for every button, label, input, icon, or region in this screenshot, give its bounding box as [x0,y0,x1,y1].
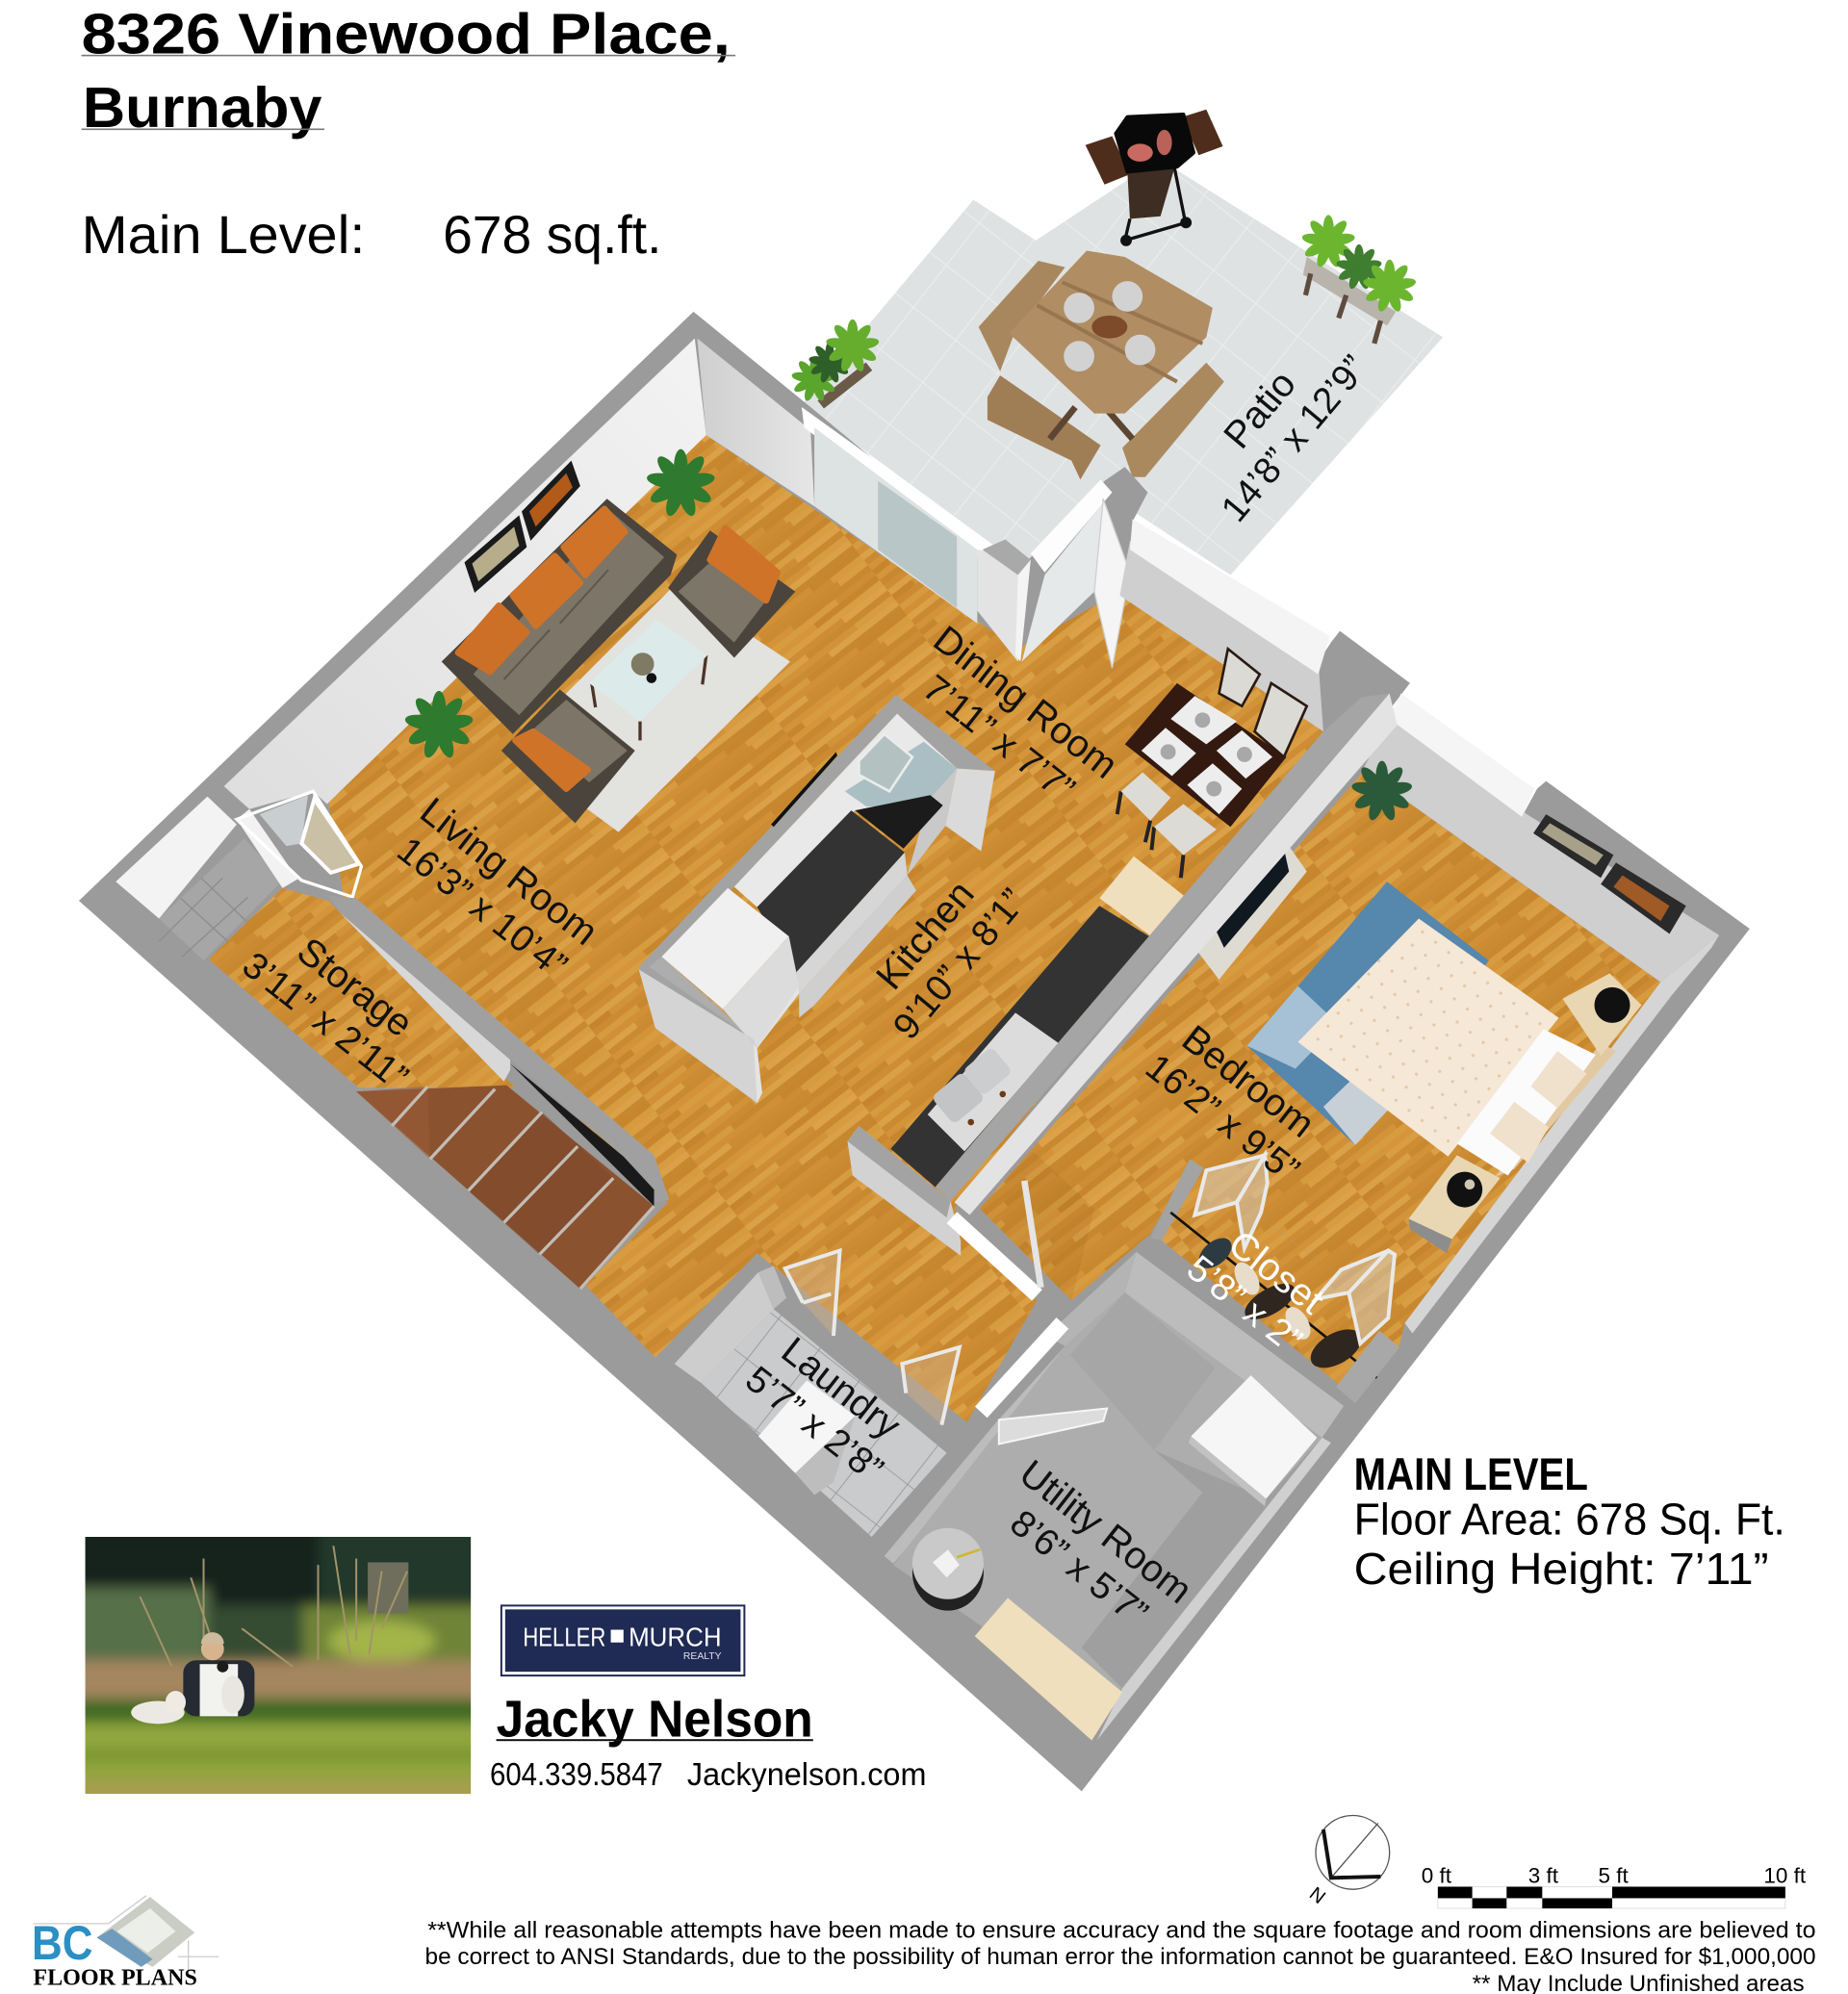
dining room back wall with window [1119,519,1410,731]
title: 8326 Vinewood Place, [82,2,731,66]
room label: living room: 16’3” x 10’4” [390,830,575,986]
agent name: Jacky Nelson [497,1691,813,1749]
panel: laundry [675,1251,960,1537]
panel: utility room [885,1252,1344,1741]
partition wall [936,694,1398,1215]
logo: Heller Murch Realty: HELLER [523,1623,605,1652]
panel: bedroom [980,694,1750,1333]
barbecue grill [1086,110,1222,246]
nightstands and lamps [1562,973,1641,1056]
artwork on living room wall [465,461,580,593]
plant left of sofa [404,691,474,760]
agent contact: Jackynelson.com [687,1757,926,1793]
wall pictures [1533,814,1613,878]
right wall face [1405,935,1719,1333]
living room rug [509,585,790,832]
disclaimer: be correct to ANSI Standards, due to the possibility of human error the information cannot be guaranteed. E&O Insured for $1,000,000 [425,1944,1816,1970]
closet left wall [1150,1159,1204,1240]
room label: laundry [737,1322,919,1491]
logo: BC Floor Plans: BC [32,1916,93,1970]
room label: dining room: Dining Room [926,618,1125,787]
doorway frame [1031,479,1112,573]
logo: Heller Murch Realty: REALTY [683,1651,722,1662]
patio door leaf [1094,498,1130,668]
headboard area [1495,1043,1616,1177]
outer wall cap [639,695,995,1103]
panel: living, dining and kitchen floor [328,435,1323,1422]
wall pillar beside door [977,550,1031,661]
sliding patio door [814,427,977,624]
agent contact: 604.339.5847 [490,1757,663,1793]
scale bar: 0 ft [1422,1864,1452,1888]
bedroom back wall [1363,707,1719,983]
floor area summary [1354,1449,1785,1594]
kitchen stub wall [847,1126,961,1256]
agent photo [85,1537,472,1794]
compass: N [1305,1883,1329,1908]
plant right of sofa [646,449,716,518]
front wall face [639,969,762,1103]
room label: bedroom [1138,1010,1335,1191]
patio floor [802,159,1443,575]
room label: utility room: 8’6” x 5’7” [1002,1502,1156,1634]
logo: Heller Murch Realty [501,1605,744,1675]
bedroom window ledge [1390,694,1534,817]
kitchen sink counter [890,856,1187,1187]
planter left [791,320,880,404]
laundry door lower [902,1347,960,1425]
scale bar: 10 ft [1763,1864,1807,1888]
main level area heading: Main Level: [82,205,365,265]
agent contact [490,1757,926,1793]
floor area summary: Floor Area: 678 Sq. Ft. [1354,1494,1785,1544]
armchair [668,528,795,657]
disclaimer [425,1917,1816,1994]
room label: laundry: 5’7” x 2’8” [737,1358,891,1491]
living side rail [771,752,837,827]
floor area summary: Ceiling Height: 7’11” [1354,1544,1769,1594]
bed [1297,918,1559,1157]
plant [1350,761,1413,822]
storage cabinet [116,797,282,960]
panel: patio [791,110,1443,575]
kitchen counter [757,810,905,972]
washer dryer [758,1380,855,1495]
hanging clothes [1194,1232,1368,1376]
room label: storage: 3’11” x 2’11” [235,944,416,1098]
scale bar: 3 ft [1528,1864,1559,1888]
room label: dining room: 7’11” x 7’7” [915,667,1082,810]
storage door [237,791,361,897]
room label: bedroom: Bedroom [1174,1017,1322,1146]
room label: bedroom: 16’2” x 9’5” [1138,1046,1307,1191]
blue rug [1247,882,1489,1145]
disclaimer: **While all reasonable attempts have been made to ensure accuracy and the square footage and room dimensions are believed to [427,1917,1816,1943]
wall between living room and stairs [328,896,669,1204]
closet bifold door left [1194,1155,1268,1248]
closet bifold door right [1316,1251,1395,1343]
utility counter [975,1598,1122,1741]
picnic table with benches [979,250,1224,479]
room label: storage: Storage [289,930,421,1045]
utility door [999,1408,1107,1444]
scale bar [1422,1864,1807,1908]
kitchen peninsula [639,695,995,1103]
planter right [1301,215,1417,344]
logo: BC Floor Plans [32,1896,218,1990]
room label: utility room: Utility Room [1012,1452,1199,1612]
floor area summary: MAIN LEVEL [1354,1449,1588,1500]
room label: living room: Living Room [412,790,605,954]
door frames [952,1181,1063,1412]
chaise [501,690,635,823]
scale bar: 5 ft [1598,1864,1629,1888]
side wall end [945,768,995,851]
main level area heading: 678 sq.ft. [443,205,661,265]
back wall [734,714,957,908]
room label: closet: 5’8” x 2” [1179,1247,1310,1362]
panel: building shell [79,312,1750,1791]
dining set [1117,649,1307,878]
compass [1305,1816,1390,1908]
room label: patio: 14’8” x 12’9” [1214,347,1375,530]
main level area heading [82,205,661,265]
room label: kitchen: Kitchen [868,873,983,998]
logo: Heller Murch Realty: MURCH [629,1623,722,1652]
staircase [356,1063,654,1289]
washer [1189,1375,1317,1506]
logo: BC Floor Plans: FLOOR PLANS [33,1965,197,1990]
tv console [1194,846,1307,980]
room label: closet [1179,1212,1338,1362]
sofa [442,498,677,734]
title: Burnaby [83,75,321,140]
title [82,2,735,140]
coffee table [589,620,707,740]
room label: kitchen [850,852,1035,1047]
living room walls [224,339,1130,809]
panel: closet [1150,1155,1405,1403]
fridge [661,888,789,1009]
range hood and cooktop [845,742,957,806]
room label: closet: Closet [1220,1222,1332,1322]
storage floor [209,888,515,1087]
room label: patio: Patio [1216,363,1304,457]
room label: kitchen: 9’10” x 8’1” [886,881,1035,1047]
laundry door upper [785,1251,840,1336]
bedroom floor [980,771,1660,1323]
room label: laundry: Laundry [774,1329,909,1447]
water heater [912,1528,984,1611]
